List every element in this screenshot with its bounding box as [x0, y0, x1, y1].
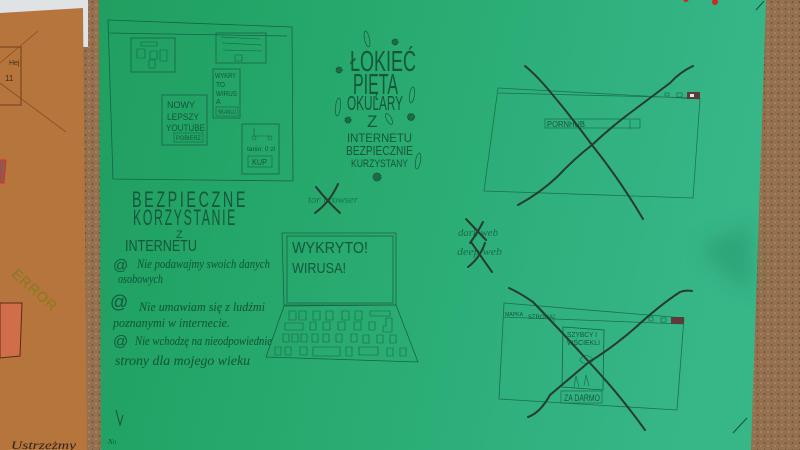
crossed-out deep web label: deep web — [457, 246, 503, 258]
tab labels — [505, 312, 554, 322]
slogan with bugs and paper clips: KURZYSTANY — [351, 158, 409, 170]
sketched window with diagonal lines — [0, 31, 66, 132]
tab labels: STRONA — [528, 315, 553, 321]
laptop screen: WIRUSA! — [292, 260, 346, 277]
error label: ERROR — [9, 265, 61, 314]
rule 1 — [113, 256, 270, 286]
search box — [545, 119, 640, 129]
big cross — [518, 66, 693, 219]
heading: safe internet use: INTERNETU — [125, 238, 197, 255]
pop-up: virus warning: TO — [216, 82, 226, 89]
panel: browser with pop-up ads — [108, 20, 293, 181]
pop-up: new better youtube: POBIERZ — [176, 135, 201, 142]
red marks at the top edge — [684, 0, 718, 5]
sketched window with diagonal lines: 11 — [5, 74, 14, 83]
rule 2: Nie umawiam się z ludźmi — [138, 299, 265, 314]
pop-up: scooter for sale: tanio: 0 zł — [247, 147, 276, 153]
heading: safe internet use: BEZPIECZNE — [132, 187, 248, 212]
red hatched box — [0, 303, 22, 358]
sketched window with diagonal lines: Hej — [9, 60, 20, 67]
pop-up: scooter for sale: KUP — [252, 158, 267, 167]
rule 3 — [113, 333, 272, 369]
laptop keyboard — [266, 305, 418, 362]
movie pop-up: SZYBCY I — [567, 332, 597, 339]
rule 1: Nie podawajmy swoich danych — [136, 256, 270, 271]
crossed-out browser: free movie — [499, 288, 692, 430]
pop-up: new better youtube: NOWY — [167, 100, 195, 110]
slogan with bugs and paper clips: Z — [367, 112, 377, 131]
heading: safe internet use: Z — [176, 229, 183, 241]
crossed-out tor browser — [308, 184, 358, 213]
window controls — [665, 92, 700, 99]
rule 3: @ — [113, 333, 128, 350]
pop-up: small tiles — [131, 38, 175, 72]
movie pop-up: ZA DARMO — [564, 393, 600, 403]
search box: PORNHUB — [547, 120, 585, 129]
slogan with bugs and paper clips: INTERNETU — [347, 131, 412, 145]
pop-up: virus warning: WIRUS — [216, 91, 237, 98]
slogan with bugs and paper clips — [335, 31, 422, 181]
list of safety rules — [110, 256, 272, 369]
corner pin marks — [116, 1, 764, 433]
big cross — [509, 288, 692, 430]
pop-up: new better youtube — [162, 95, 207, 145]
pop-up: virus warning: SKANUJ — [218, 110, 236, 116]
rule 1: osobowych — [118, 271, 163, 286]
movie pop-up: WŚCIEKLI — [567, 338, 600, 347]
tab labels: MAPKA — [505, 312, 523, 318]
icons: paper clips — [335, 31, 422, 169]
pop-up: virus warning: WYKRY — [215, 73, 236, 80]
pop-up: text lines — [216, 33, 266, 63]
slogan with bugs and paper clips: PIĘTA — [353, 69, 398, 101]
heading: safe internet use: KORZYSTANIE — [133, 205, 237, 230]
crossed-out browser: search — [484, 66, 700, 219]
slogan with bugs and paper clips: OKULARY — [347, 93, 403, 115]
laptop screen — [282, 233, 396, 305]
rule 2 — [110, 292, 265, 330]
crossed-out dark web label — [458, 219, 498, 243]
bottom-left small note: No — [107, 438, 117, 446]
panel: brown poster on the left — [0, 8, 87, 450]
icons: bugs — [336, 39, 414, 181]
rule 3: Nie wchodzę na nieodpowiednie — [134, 333, 272, 348]
crossed-out tor browser: tor browser — [308, 195, 358, 206]
pop-up: virus warning: A — [216, 99, 221, 106]
rule 1: @ — [113, 257, 128, 274]
laptop with virus message — [266, 233, 418, 362]
pop-up: new better youtube: LEPSZY — [167, 112, 199, 122]
rule 2: @ — [110, 292, 128, 312]
crossed-out dark web label: dark web — [458, 227, 498, 239]
white paper behind brown poster — [0, 0, 88, 47]
pop-up: scooter for sale — [242, 124, 279, 174]
laptop screen: WYKRYTO! — [292, 240, 368, 257]
slogan with bugs and paper clips: BEZPIECZNIE — [346, 143, 413, 158]
window controls — [649, 317, 684, 324]
red sketched shape — [0, 160, 6, 183]
pop-up: new better youtube: YOUTUBE — [166, 123, 205, 133]
rule 3: strony dla mojego wieku — [115, 354, 250, 369]
slogan with bugs and paper clips: ŁOKIEĆ — [350, 45, 416, 78]
heading: safe internet use — [125, 187, 248, 255]
pop-up: virus warning — [213, 69, 240, 118]
movie pop-up — [561, 327, 604, 403]
paper crease shadow — [700, 225, 752, 290]
crossed-out deep web label — [457, 242, 503, 272]
rule 2: poznanymi w internecie. — [112, 315, 230, 330]
